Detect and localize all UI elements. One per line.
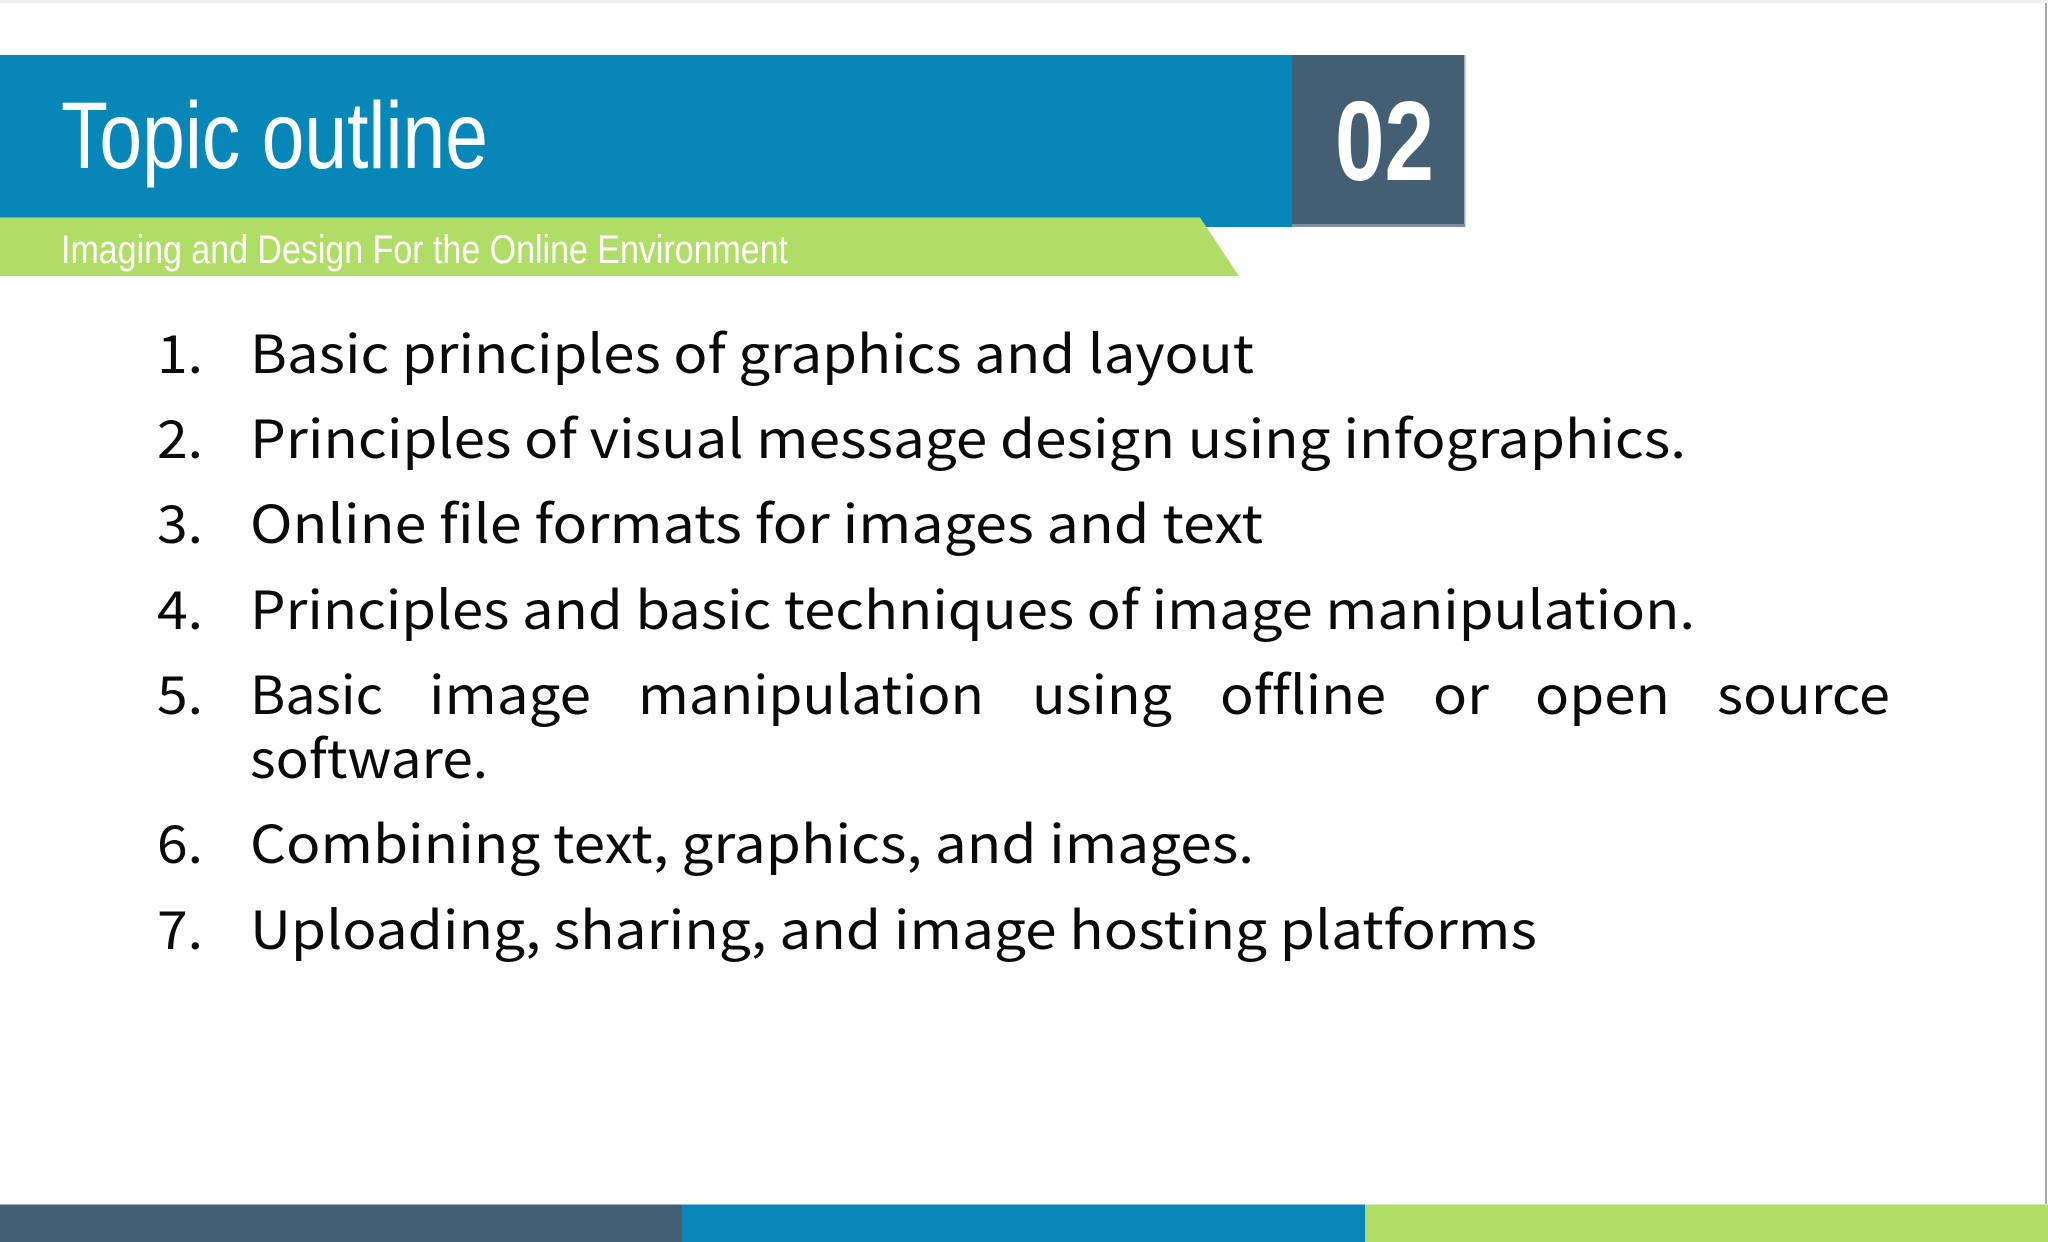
item 5: offline bbox=[1220, 654, 1386, 730]
item 1: Basic principles of graphics and layout bbox=[250, 313, 1254, 389]
section number box: 02 bbox=[1335, 78, 1434, 204]
item 3: 3. bbox=[157, 483, 203, 559]
item 5: or bbox=[1433, 654, 1490, 730]
header banner bbox=[0, 55, 1466, 276]
item 4: Principles and basic techniques of image manipulation. bbox=[250, 569, 1695, 645]
item 5: manipulation bbox=[638, 654, 984, 730]
item 5: software. bbox=[250, 718, 488, 794]
item 1: 1. bbox=[157, 313, 203, 389]
item 7: Uploading, sharing, and image hosting platforms bbox=[250, 889, 1537, 965]
item 5: 5. bbox=[157, 654, 203, 730]
item 5: open bbox=[1535, 654, 1670, 730]
item 2: 2. bbox=[157, 398, 203, 474]
item 6: Combining text, graphics, and images. bbox=[250, 803, 1254, 879]
numbered topic list bbox=[157, 313, 1890, 965]
title: Topic outline bbox=[61, 83, 488, 189]
item 2: Principles of visual message design using infographics. bbox=[250, 398, 1686, 474]
footer colour bar bbox=[0, 1204, 2048, 1242]
item 5: Basic bbox=[250, 654, 383, 730]
item 6: 6. bbox=[157, 803, 203, 879]
subtitle ribbon bbox=[0, 218, 1239, 276]
item 5: image bbox=[429, 654, 591, 730]
subtitle ribbon: Imaging and Design For the Online Environment bbox=[61, 228, 788, 272]
item 3: Online file formats for images and text bbox=[250, 483, 1263, 559]
item 4: 4. bbox=[157, 569, 203, 645]
item 5: source bbox=[1717, 654, 1890, 730]
item 5: using bbox=[1032, 654, 1172, 730]
title bar bbox=[0, 55, 1293, 227]
item 7: 7. bbox=[157, 889, 203, 965]
item 5 bbox=[157, 654, 1890, 794]
section number box bbox=[1292, 55, 1466, 227]
